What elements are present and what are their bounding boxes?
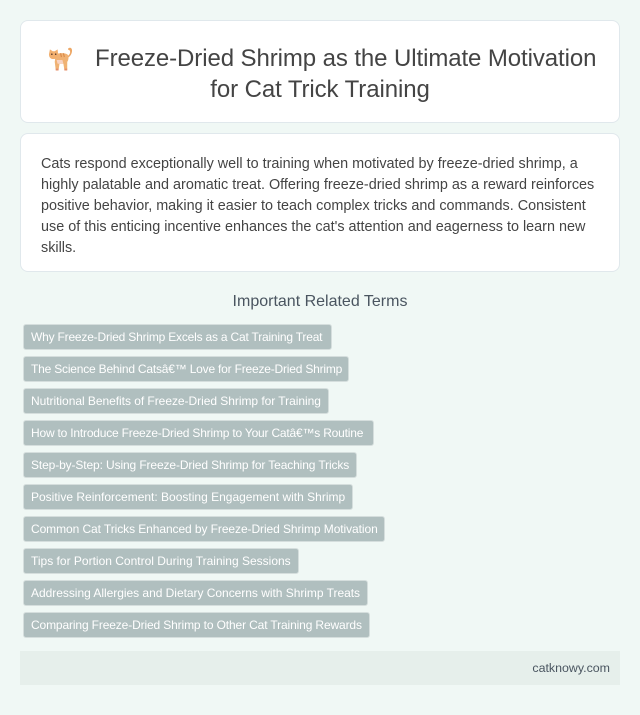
description text: Cats respond exceptionally well to training when motivated by freeze-dried shrimp, a xyxy=(41,156,578,172)
tag 6 xyxy=(23,484,353,510)
panel: title card xyxy=(20,20,620,123)
tag 9 xyxy=(23,580,368,606)
tag 9: Addressing Allergies and Dietary Concerns with Shrimp Treats xyxy=(31,586,360,600)
footer source: catknowy.com xyxy=(532,661,610,675)
tag 1 xyxy=(23,324,332,350)
tag 5: Step-by-Step: Using Freeze-Dried Shrimp for Teaching Tricks xyxy=(31,458,349,472)
tag 4: How to Introduce Freeze-Dried Shrimp to Your Catâ€™s Routine xyxy=(31,426,363,440)
icon: cat xyxy=(49,48,72,70)
description text xyxy=(41,156,594,256)
tag 7 xyxy=(23,516,385,542)
title xyxy=(95,45,596,103)
tag 8: Tips for Portion Control During Training Sessions xyxy=(31,554,291,568)
tag 1: Why Freeze-Dried Shrimp Excels as a Cat Training Treat xyxy=(31,330,322,344)
tag 3: Nutritional Benefits of Freeze-Dried Shrimp for Training xyxy=(31,394,321,408)
description text: use of this enticing incentive enhances the cat's attention and eagerness to learn new xyxy=(41,219,585,235)
tag 10: Comparing Freeze-Dried Shrimp to Other Cat Training Rewards xyxy=(31,618,362,632)
description text: highly palatable and aromatic treat. Offering freeze-dried shrimp as a reward reinforces xyxy=(41,177,594,193)
tag 6: Positive Reinforcement: Boosting Engagement with Shrimp xyxy=(31,490,345,504)
heading: related terms: Important Related Terms xyxy=(233,293,407,310)
tag 7: Common Cat Tricks Enhanced by Freeze-Dried Shrimp Motivation xyxy=(31,522,378,536)
list: related term tags xyxy=(23,324,385,638)
tag 2 xyxy=(23,356,349,382)
tag 2: The Science Behind Catsâ€™ Love for Freeze-Dried Shrimp xyxy=(31,362,342,376)
description text: skills. xyxy=(41,240,76,256)
tag 10 xyxy=(23,612,370,638)
tag 4 xyxy=(23,420,374,446)
description text: positive behavior, making it easier to teach complex tricks and commands. Consistent xyxy=(41,198,586,214)
title: for Cat Trick Training xyxy=(210,76,430,103)
tag 3 xyxy=(23,388,329,414)
panel: description card xyxy=(20,133,620,272)
title: Freeze-Dried Shrimp as the Ultimate Motivation xyxy=(95,45,596,72)
footer bar xyxy=(20,651,620,685)
tag 5 xyxy=(23,452,357,478)
tag 8 xyxy=(23,548,299,574)
